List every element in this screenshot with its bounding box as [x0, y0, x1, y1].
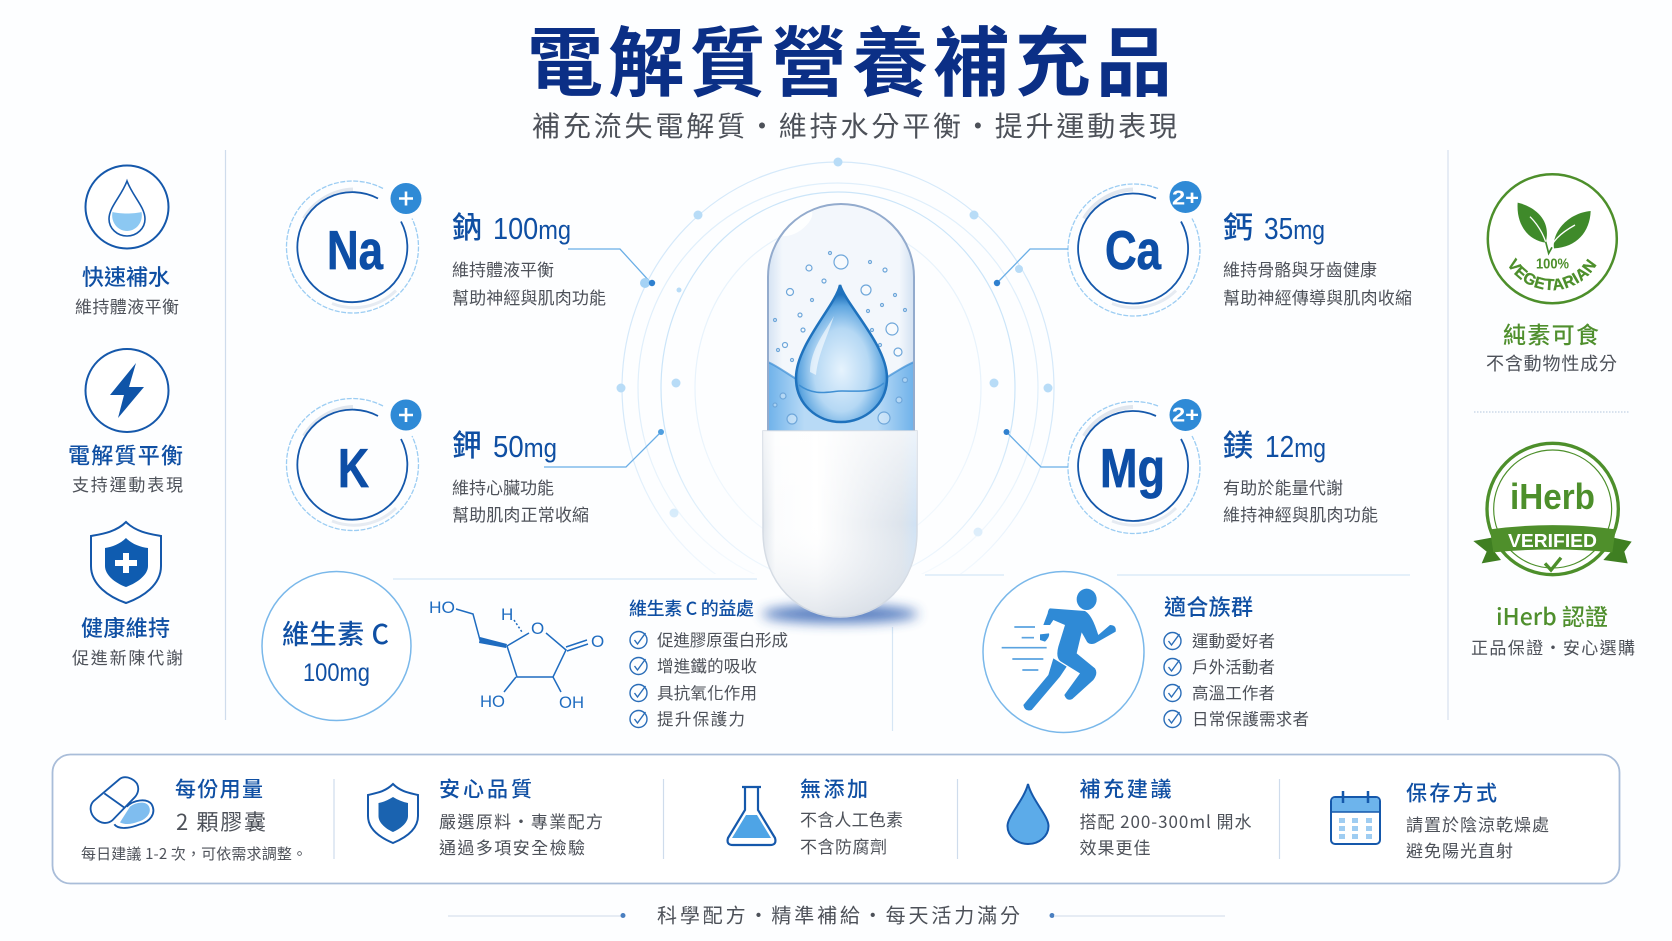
icon: capsules — [91, 777, 153, 828]
text: calcium benefits — [1223, 256, 1412, 309]
connector: sodium — [568, 249, 655, 288]
dosage: sodium — [452, 203, 571, 247]
text: sodium benefits: 幫助神經與肌肉功能 — [452, 284, 606, 309]
element: sodium — [286, 181, 655, 313]
section: storage: 請置於陰涼乾燥處 — [1406, 811, 1549, 836]
checklist: target groups: 高溫工作者 — [1192, 680, 1275, 704]
icon: calendar — [1331, 791, 1380, 844]
connector: potassium — [544, 429, 664, 467]
section: usage suggestion: 補充建議 — [1080, 774, 1172, 804]
element: calcium — [994, 181, 1412, 316]
dosage: potassium: 50mg — [493, 429, 557, 464]
dosage: magnesium — [1223, 421, 1326, 465]
text: magnesium benefits: 維持神經與肌肉功能 — [1223, 501, 1378, 526]
heading: rapid hydration: 快速補水 — [82, 260, 170, 292]
section: no additives: 不含人工色素 — [800, 806, 903, 831]
subtitle: 補充流失電解質・維持水分平衡・提升運動表現 — [532, 105, 1177, 145]
checklist: target groups: 日常保護需求者 — [1192, 706, 1309, 730]
capsule illustration — [762, 202, 918, 623]
chart: vitamin C molecular structure: H — [501, 605, 513, 624]
orbit rings and dots — [616, 158, 1054, 614]
section: serving size: 每日建議 1-2 次，可依需求調整。 — [81, 843, 307, 864]
panel: bottom info bar — [52, 754, 1620, 884]
text: potassium benefits: 維持心臟功能 — [452, 474, 554, 499]
section: storage — [1331, 778, 1549, 862]
connector: calcium — [994, 249, 1068, 286]
capsule top glass — [768, 202, 914, 432]
text: magnesium benefits: 有助於能量代謝 — [1223, 474, 1343, 499]
element: potassium — [286, 399, 664, 531]
section: quality: 安心品質 — [439, 774, 532, 804]
section: quality — [368, 774, 603, 859]
panel: left benefits — [68, 166, 183, 669]
badge: iHerb verified: VERIFIED — [1508, 530, 1597, 551]
section: usage suggestion: 效果更佳 — [1080, 834, 1150, 859]
checklist: target groups — [1164, 628, 1309, 730]
element: magnesium — [1004, 399, 1378, 533]
dosage: calcium: 35mg — [1264, 211, 1325, 246]
section: usage suggestion: 搭配 200-300ml 開水 — [1080, 808, 1252, 833]
text: iHerb certified: 正品保證・安心選購 — [1471, 634, 1635, 659]
badge: 100% vegetarian — [1486, 173, 1618, 304]
text: vegetarian: 不含動物性成分 — [1486, 350, 1617, 376]
badge: 100% vegetarian: 100% — [1536, 256, 1569, 272]
badge: vitamin C 100mg — [262, 572, 411, 720]
section: quality: 通過多項安全檢驗 — [439, 834, 585, 859]
checklist: target groups: 運動愛好者 — [1192, 628, 1275, 652]
icon: runner in circle — [983, 572, 1144, 732]
connector: magnesium — [1004, 429, 1068, 467]
footer tagline — [448, 900, 1225, 928]
chart: vitamin C molecular structure: OH — [559, 693, 584, 712]
dosage: potassium — [452, 421, 557, 465]
badge: vitamin C 100mg: 100mg — [303, 659, 370, 687]
text: sodium benefits: 維持體液平衡 — [452, 256, 554, 281]
atom badge: Na — [286, 181, 422, 313]
heading: iHerb certified: iHerb 認證 — [1496, 598, 1608, 632]
chart: vitamin C molecular structure: HO — [480, 692, 505, 711]
dosage: magnesium: 鎂 — [1223, 421, 1253, 465]
text: potassium benefits — [452, 474, 589, 526]
badge: iHerb verified: iHerb — [1510, 476, 1595, 517]
atom badge: Ca: 2+ — [1172, 188, 1199, 210]
icon: flask — [728, 787, 775, 845]
icon: quality shield — [368, 784, 418, 843]
dosage: calcium — [1223, 203, 1325, 247]
heading: target groups: 適合族群 — [1164, 590, 1253, 622]
chart: vitamin C molecular structure — [429, 598, 604, 712]
section: usage suggestion — [1008, 774, 1252, 859]
atom badge: K — [286, 399, 422, 531]
section: quality: 嚴選原料・專業配方 — [439, 808, 603, 833]
atom badge: Mg: 2+ — [1172, 404, 1199, 426]
text: potassium benefits: 幫助肌肉正常收縮 — [452, 501, 589, 526]
title: 電解質營養補充品 — [527, 2, 1172, 112]
badge: iHerb verified — [1473, 443, 1632, 575]
atom badge: Ca — [1068, 181, 1202, 316]
vertical separator lower section — [892, 627, 894, 731]
panel: right certifications — [1471, 173, 1635, 659]
atom badge: Na: Na — [327, 219, 383, 281]
section: serving size — [81, 774, 307, 864]
chart: vitamin C molecular structure: O — [591, 632, 604, 651]
text: magnesium benefits — [1223, 474, 1378, 526]
chart: vitamin C molecular structure: HO — [429, 598, 455, 617]
badge: vitamin C 100mg: 維生素 C — [282, 613, 389, 652]
right column divider — [1447, 150, 1449, 720]
divider: dotted — [1474, 411, 1630, 413]
text: rapid hydration: 維持體液平衡 — [75, 293, 179, 318]
checklist: vitamin C benefits: 具抗氧化作用 — [657, 680, 757, 704]
chart: vitamin C molecular structure: O — [531, 619, 544, 638]
icon: lightning bolt in circle — [86, 349, 168, 432]
checklist: target groups: 戶外活動者 — [1192, 654, 1275, 678]
text: calcium benefits: 維持骨骼與牙齒健康 — [1223, 256, 1377, 281]
text: electrolyte balance: 支持運動表現 — [72, 471, 183, 496]
badge: 100% vegetarian: VEGETARIAN — [1509, 258, 1596, 290]
dosage: magnesium: 12mg — [1265, 429, 1326, 464]
left column divider — [224, 150, 226, 720]
atom badge: K: K — [338, 437, 369, 499]
horizontal separators lower section — [393, 575, 1410, 579]
heading: vitamin C benefits: 維生素 C 的益處 — [629, 595, 754, 621]
dosage: potassium: 鉀 — [452, 421, 482, 465]
checklist: vitamin C benefits: 促進膠原蛋白形成 — [657, 627, 788, 651]
water droplet — [796, 285, 887, 422]
capsule bottom shell — [763, 431, 917, 617]
checklist: vitamin C benefits: 提升保護力 — [657, 706, 745, 730]
panel: target groups — [983, 572, 1309, 732]
text: calcium benefits: 幫助神經傳導與肌肉收縮 — [1223, 284, 1412, 309]
section: storage: 避免陽光直射 — [1406, 837, 1513, 862]
text: health maintenance: 促進新陳代謝 — [72, 644, 183, 669]
dosage: sodium: 鈉 — [452, 203, 482, 247]
heading: vegetarian: 純素可食 — [1503, 316, 1599, 350]
section: no additives: 無添加 — [800, 774, 868, 804]
checklist: vitamin C benefits — [630, 627, 788, 730]
capsule shadow — [762, 605, 918, 623]
section: storage: 保存方式 — [1406, 778, 1497, 808]
atom badge: Mg: Mg — [1100, 437, 1165, 499]
footer tagline: 科學配方・精準補給・每天活力滿分 — [657, 900, 1020, 928]
section: serving size: 2 顆膠囊 — [176, 805, 266, 837]
checklist: vitamin C benefits: 增進鐵的吸收 — [657, 653, 757, 677]
atom badge: Mg — [1068, 399, 1202, 533]
panel: vitamin C — [262, 572, 788, 730]
icon: droplet — [1008, 784, 1048, 844]
icon: health shield — [91, 522, 161, 603]
section: no additives — [728, 774, 903, 858]
atom badge: Ca: Ca — [1105, 219, 1161, 281]
section: serving size: 每份用量 — [175, 774, 263, 804]
heading: electrolyte balance: 電解質平衡 — [68, 438, 183, 470]
text: sodium benefits — [452, 256, 606, 309]
heading: health maintenance: 健康維持 — [81, 611, 170, 643]
section: no additives: 不含防腐劑 — [800, 833, 887, 858]
dosage: sodium: 100mg — [493, 211, 571, 246]
dosage: calcium: 鈣 — [1223, 203, 1253, 247]
icon: water drop in circle — [86, 166, 168, 248]
